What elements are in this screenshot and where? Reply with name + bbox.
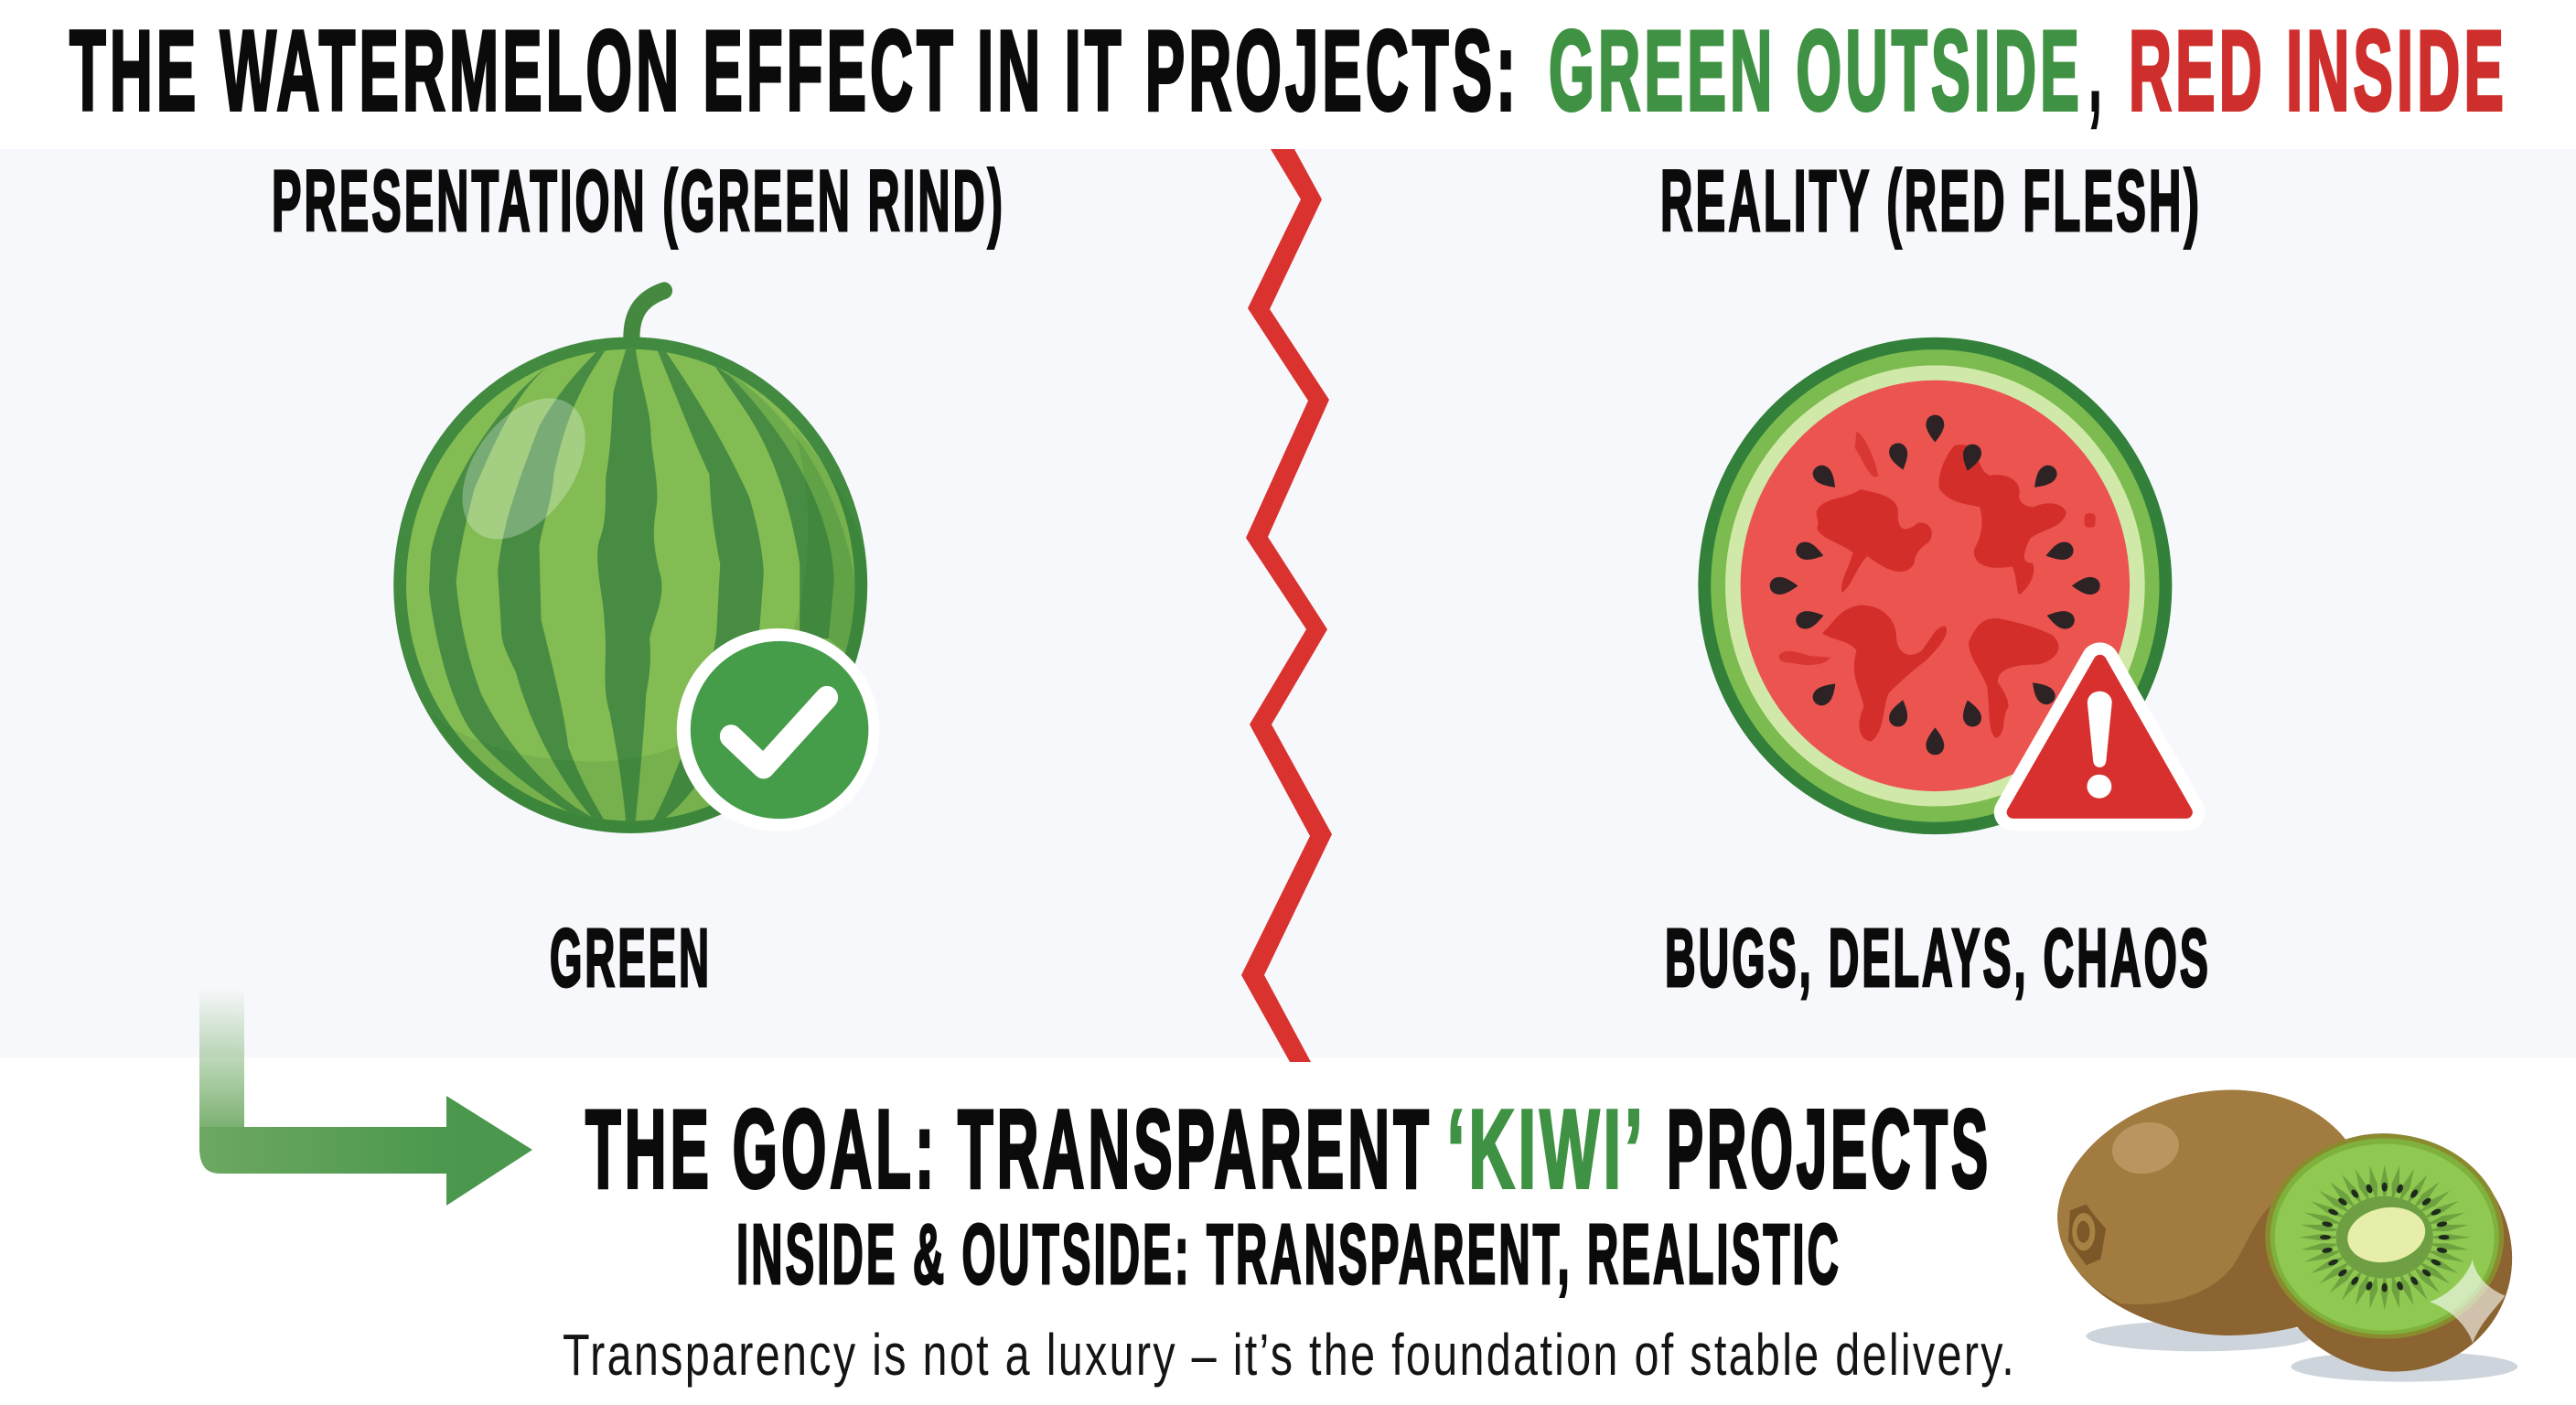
heading: presentation: PRESENTATION (GREEN RIND) [272, 153, 1005, 250]
goal heading: THE GOAL: TRANSPARENT [585, 1087, 1433, 1211]
zigzag divider [1241, 149, 1332, 1062]
tagline: Transparency is not a luxury – it’s the foundation of stable delivery. [563, 1322, 2016, 1388]
arrow to goal [199, 988, 532, 1206]
watermelon shading [431, 425, 867, 833]
cut kiwi half [2245, 1117, 2534, 1389]
kiwi shadows [2087, 1321, 2517, 1382]
comparison background band [0, 149, 2576, 1057]
check badge [677, 628, 879, 831]
title: , [2089, 8, 2104, 134]
warning triangle badge [2013, 661, 2186, 812]
icon: whole watermelon with check badge [393, 291, 879, 833]
title: GREEN OUTSIDE [1549, 8, 2083, 134]
goal heading: ‘KIWI’ [1447, 1087, 1647, 1211]
icon: cut watermelon with warning badge [1698, 338, 2186, 834]
icon: kiwi [2057, 1090, 2534, 1389]
red flesh blotches [1779, 432, 2096, 742]
whole kiwi [2057, 1090, 2354, 1335]
text: PROJECTS [1667, 1087, 1991, 1211]
rind layers [1698, 338, 2172, 834]
watermelon stem [631, 291, 664, 338]
watermelon highlight [437, 374, 610, 563]
label: green: GREEN [550, 913, 712, 1004]
seeds [1770, 415, 2100, 755]
watermelon body [393, 337, 867, 833]
